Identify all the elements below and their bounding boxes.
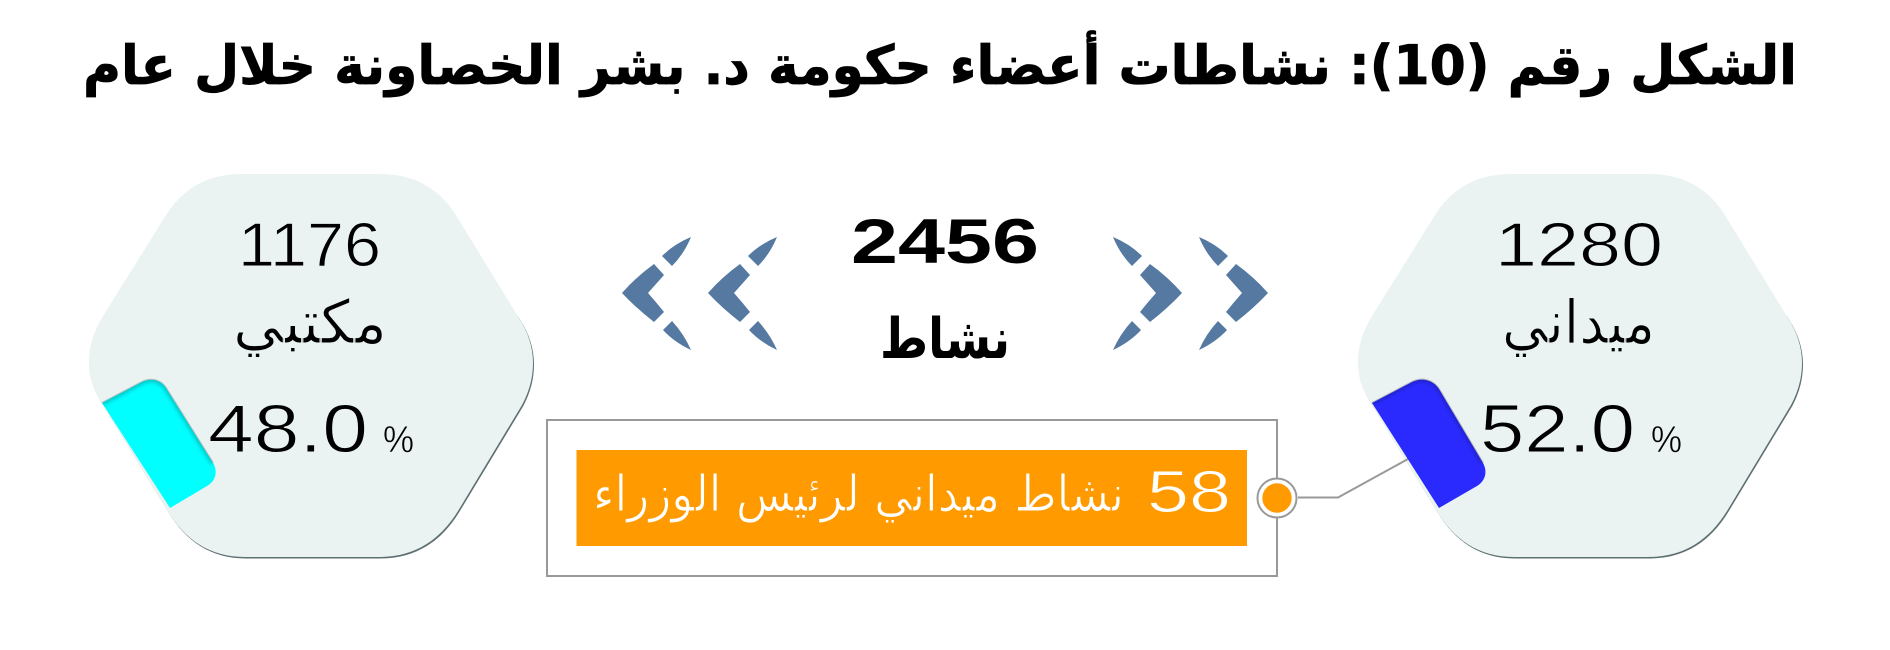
office label: مكتبي <box>233 288 387 358</box>
panel: field activities hexagon <box>1298 174 1803 558</box>
icon: blue tab <box>1372 380 1485 508</box>
callout frame <box>547 420 1277 576</box>
icon: right chevrons <box>1113 237 1268 350</box>
callout text: نشاط ميداني لرئيس الوزراء <box>593 465 1124 523</box>
total label: نشاط <box>880 307 1010 372</box>
connector line <box>1298 459 1408 498</box>
icon: left chevrons <box>622 237 777 350</box>
field count: 1280 <box>1495 211 1663 280</box>
field label: ميداني <box>1502 288 1655 358</box>
icon: cyan tab <box>102 380 216 508</box>
callout: prime minister field activities <box>547 420 1296 576</box>
percent sign: % <box>383 419 414 461</box>
callout number: 58 <box>1147 459 1231 525</box>
hexagon shape <box>1358 174 1803 558</box>
total count: 2456 <box>851 207 1039 277</box>
hexagon shape <box>89 174 534 558</box>
connector dot <box>1258 478 1296 518</box>
office count: 1176 <box>238 211 381 280</box>
callout banner <box>576 450 1247 546</box>
office percent: 48.0 <box>208 391 368 467</box>
percent sign: % <box>1651 419 1682 461</box>
title: الشكل رقم (10): نشاطات أعضاء حكومة د. بشر الخصاونة خلال عام <box>83 30 1797 97</box>
field percent: 52.0 <box>1480 391 1635 467</box>
panel: office activities hexagon <box>89 174 534 558</box>
